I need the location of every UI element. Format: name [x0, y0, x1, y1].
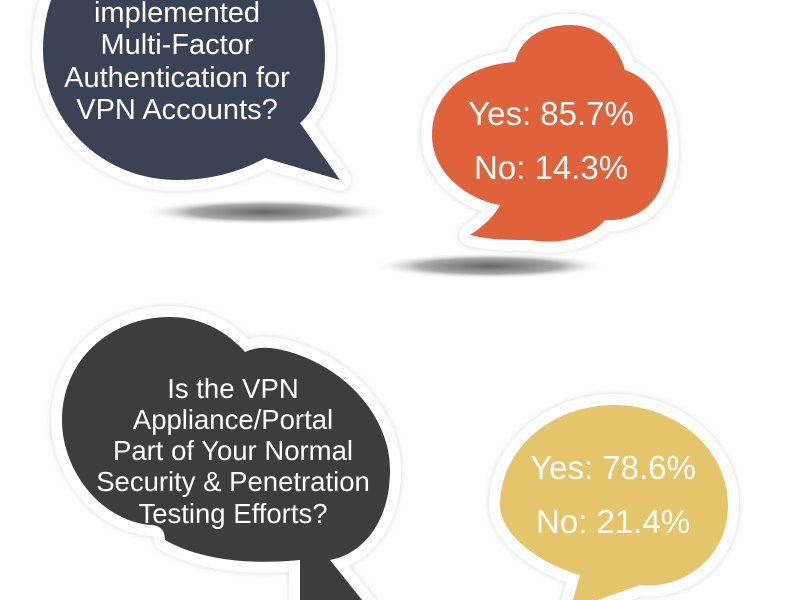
answer text 1 — [468, 95, 634, 186]
panel: multi-factor question bubble — [43, 0, 340, 180]
question text 2 — [96, 373, 370, 529]
question text 2: Security & Penetration — [96, 466, 370, 497]
answer text 2 — [530, 449, 696, 540]
panel: orange answer bubble — [432, 25, 668, 242]
answer text 2: Yes: 78.6% — [530, 449, 696, 486]
panel: gold answer bubble — [500, 405, 728, 600]
question text 2: Is the VPN — [167, 373, 299, 404]
answer text 2: No: 21.4% — [536, 503, 690, 540]
question text 2: Part of Your Normal — [113, 435, 353, 466]
shadow: orange bubble — [372, 253, 608, 279]
question text 1: Multi-Factor — [100, 29, 254, 61]
answer text 1: No: 14.3% — [474, 149, 628, 186]
question text 2: Appliance/Portal — [133, 404, 333, 435]
question text 1 — [64, 0, 290, 126]
question text 1: VPN Accounts? — [76, 94, 278, 126]
answer text 1: Yes: 85.7% — [468, 95, 634, 132]
panel: penetration testing question bubble — [62, 317, 390, 600]
question text 1: Authentication for — [64, 62, 290, 94]
shadow: bubble 1 — [140, 199, 390, 225]
question text 2: Testing Efforts? — [138, 498, 328, 529]
